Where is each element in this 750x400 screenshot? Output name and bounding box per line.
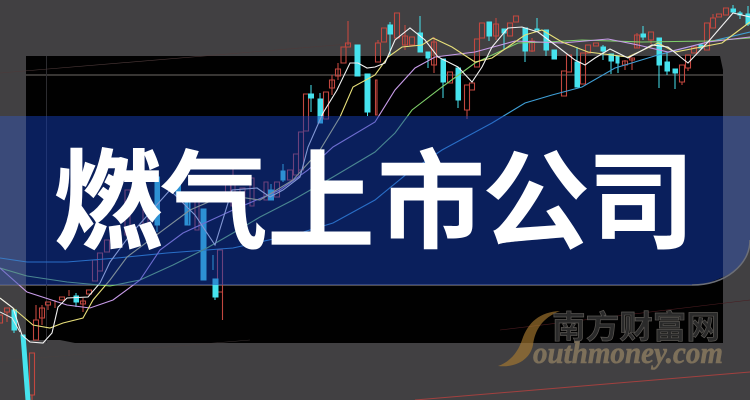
watermark latin text: outhmoney.com xyxy=(533,335,723,370)
moving averages: yellow line xyxy=(0,22,750,328)
panel: black chart area xyxy=(26,56,723,343)
title: 公 xyxy=(482,142,590,263)
moving averages: purple line xyxy=(0,37,750,308)
icon: swoosh xyxy=(498,311,560,366)
white secondary line lower-left xyxy=(0,312,20,332)
moving averages: blue line xyxy=(0,32,750,262)
title: 燃 xyxy=(54,142,162,263)
title: 司 xyxy=(587,142,695,263)
title: 气 xyxy=(160,142,268,263)
panel: blue title band xyxy=(0,116,750,285)
watermark chinese text: 南方财富网 xyxy=(552,309,720,345)
title: 市 xyxy=(377,142,485,263)
title: 上 xyxy=(267,142,375,263)
watermark: southmoney logo xyxy=(498,309,723,370)
title xyxy=(54,142,695,263)
moving averages: green line xyxy=(0,38,750,286)
